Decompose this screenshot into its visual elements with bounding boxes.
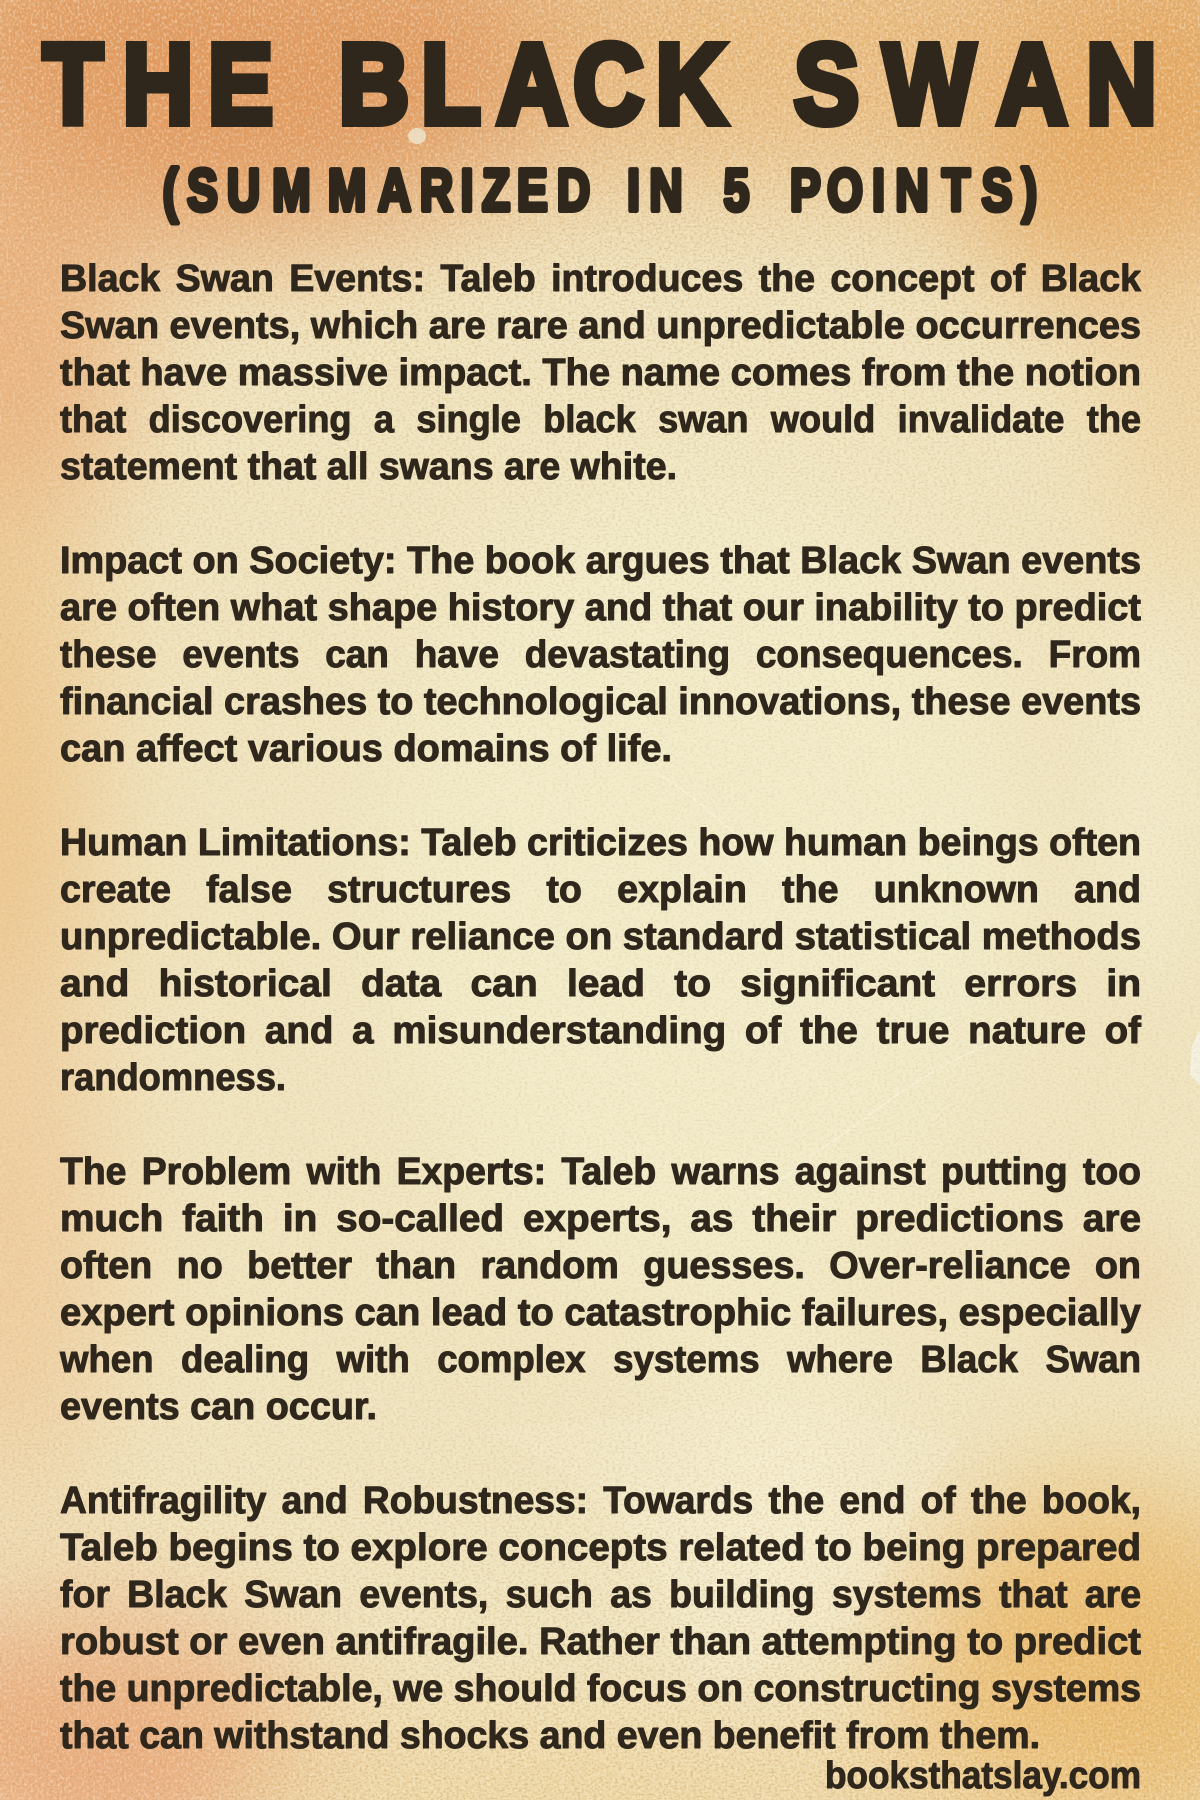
- text block: Human Limitations: unpredictable. Our reliance on standard statistical methods: [60, 916, 1141, 958]
- text block: Antifragility and Robustness: Antifragility and Robustness: Towards the end of the book,: [60, 1480, 1141, 1522]
- text block: Impact on Society: financial crashes to technological innovations, these events: [60, 681, 1141, 723]
- text block: Human Limitations: create false structures to explain the unknown and: [60, 869, 1141, 911]
- text block: Black Swan Events: [60, 258, 1142, 488]
- title: THE BLACK SWAN: [43, 22, 1157, 148]
- text block: Human Limitations: and historical data can lead to significant errors in: [60, 963, 1141, 1005]
- text block: The Problem with Experts: when dealing with complex systems where Black Swan: [59, 1339, 1141, 1381]
- text block: Black Swan Events: Black Swan Events: Taleb introduces the concept of Black: [60, 258, 1142, 300]
- text block: Human Limitations: Human Limitations: Taleb criticizes how human beings often: [60, 822, 1141, 864]
- text block: Black Swan Events: that discovering a single black swan would invalidate the: [60, 399, 1141, 441]
- text block: Black Swan Events: Swan events, which are rare and unpredictable occurrences: [60, 305, 1141, 347]
- text block: Impact on Society: are often what shape history and that our inability to predict: [60, 587, 1141, 629]
- text block: The Problem with Experts: [59, 1151, 1141, 1428]
- text block: Antifragility and Robustness: for Black Swan events, such as building systems that are: [60, 1574, 1141, 1616]
- text block: Human Limitations: randomness.: [60, 1057, 286, 1099]
- text block: Antifragility and Robustness: [60, 1480, 1141, 1757]
- text block: The Problem with Experts: events can occur.: [60, 1386, 377, 1428]
- footer: website credit: booksthatslay.com: [825, 1755, 1141, 1797]
- text block: The Problem with Experts: often no better than random guesses. Over-reliance on: [60, 1245, 1141, 1287]
- text block: Human Limitations: prediction and a misunderstanding of the true nature of: [60, 1010, 1141, 1052]
- text block: Antifragility and Robustness: that can withstand shocks and even benefit from them.: [60, 1715, 1040, 1757]
- text block: Antifragility and Robustness: Taleb begins to explore concepts related to being prepared: [60, 1527, 1141, 1569]
- text block: Antifragility and Robustness: robust or even antifragile. Rather than attempting to predict: [60, 1621, 1141, 1663]
- text block: Black Swan Events: statement that all swans are white.: [60, 446, 677, 488]
- text block: Impact on Society: [60, 540, 1141, 770]
- text block: The Problem with Experts: much faith in so-called experts, as their predictions are: [60, 1198, 1141, 1240]
- text block: Impact on Society: can affect various domains of life.: [60, 728, 672, 770]
- text block: The Problem with Experts: expert opinions can lead to catastrophic failures, especially: [60, 1292, 1141, 1334]
- text block: Impact on Society: Impact on Society: The book argues that Black Swan events: [60, 540, 1141, 582]
- text block: Human Limitations: [60, 822, 1141, 1099]
- subtitle: (SUMMARIZED IN 5 POINTS): [163, 158, 1037, 224]
- text block: Antifragility and Robustness: the unpredictable, we should focus on constructing systems: [60, 1668, 1141, 1710]
- text block: Impact on Society: these events can have devastating consequences. From: [60, 634, 1141, 676]
- text block: Black Swan Events: that have massive impact. The name comes from the notion: [60, 352, 1141, 394]
- text block: The Problem with Experts: The Problem with Experts: Taleb warns against putting too: [60, 1151, 1141, 1193]
